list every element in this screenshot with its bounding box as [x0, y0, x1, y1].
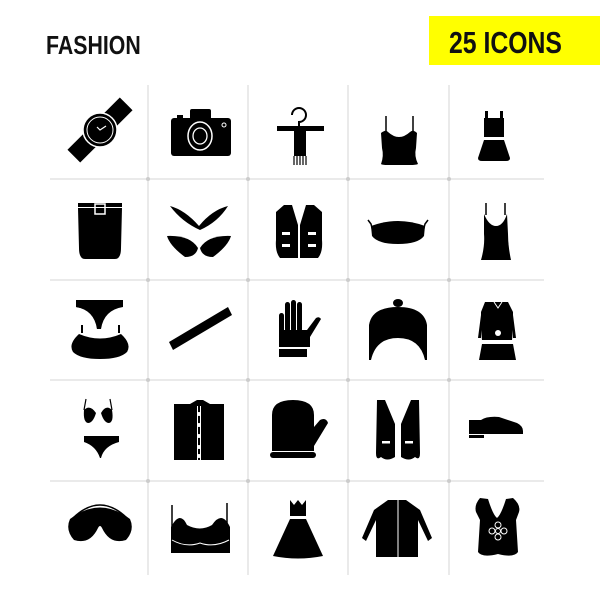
- icon: watch: [62, 92, 138, 168]
- icon: bikini: [84, 399, 119, 458]
- icon: scarf: [168, 307, 232, 351]
- icon: flared dress: [273, 500, 323, 558]
- icon: tank top: [481, 203, 511, 260]
- icon: camera: [171, 109, 231, 156]
- icon: bikini top: [167, 206, 231, 257]
- icon: vest: [276, 205, 322, 258]
- icon: collar: [68, 505, 132, 541]
- icon: mitten: [270, 400, 328, 458]
- icon: skirt: [78, 203, 122, 259]
- icon: coat: [478, 302, 516, 360]
- icon grid: [62, 92, 523, 559]
- icon: glove: [279, 300, 321, 357]
- icon: headband: [368, 220, 428, 244]
- title: FASHION: [46, 31, 141, 61]
- icon: shirt: [174, 400, 224, 460]
- badge: 25 icons: 25 ICONS: [449, 25, 562, 60]
- icon: bra: [171, 503, 230, 553]
- badge: 25 icons: [429, 16, 600, 65]
- icon: camisole: [381, 116, 418, 165]
- icon: waistcoat: [376, 400, 420, 460]
- icon: swimsuit: [71, 300, 129, 359]
- icon: embroidered vest: [476, 498, 519, 556]
- icon: hat: [369, 299, 427, 360]
- icon: scarf on hanger: [277, 108, 324, 165]
- icon: shoe: [469, 417, 523, 438]
- icon: jacket: [362, 500, 432, 557]
- icon: dress: [478, 111, 510, 161]
